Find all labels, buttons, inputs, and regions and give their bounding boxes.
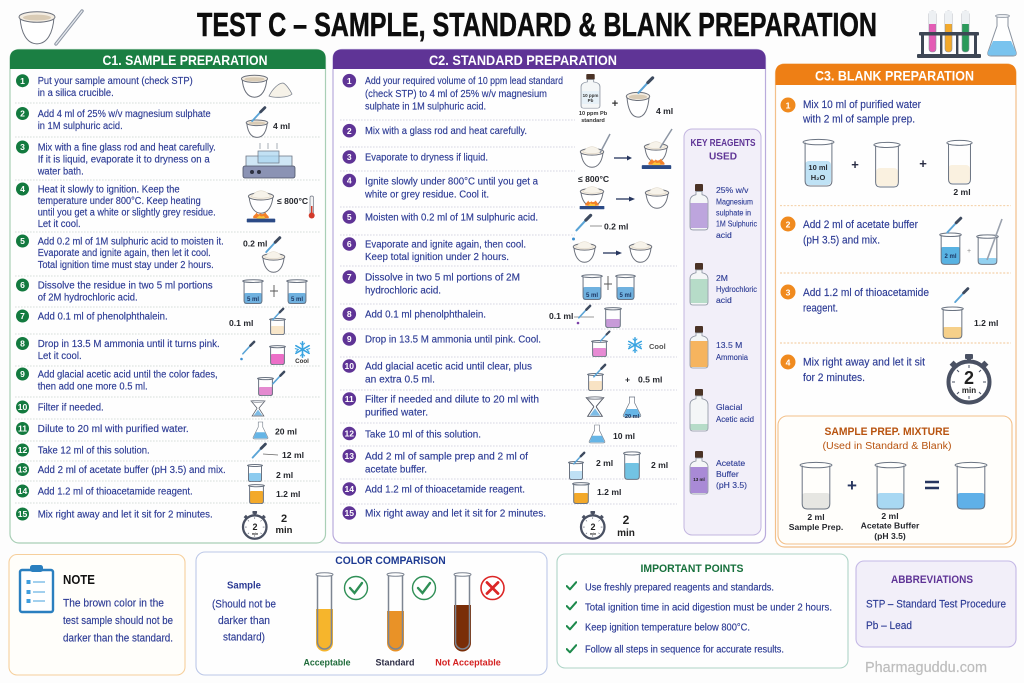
step 9 <box>342 332 541 346</box>
reagent: ammonia <box>690 326 748 368</box>
step 4: Ignite slowly under 800°C until you get a <box>365 176 538 188</box>
heading: C1: C1. SAMPLE PREPARATION <box>102 52 268 68</box>
step 5: 5 <box>347 212 352 222</box>
icon: lead standard bottle plus crucible 4 ml: 10 ppm <box>583 93 598 98</box>
icon: funnel and flask: 20 ml <box>625 414 640 420</box>
step 6: Keep total ignition under 2 hours. <box>365 252 509 263</box>
icon: beaker 2 ml <box>248 465 293 482</box>
icon: water, sample prep, sample prep beakers: 2 ml <box>953 187 971 197</box>
heading: C3: C3. BLANK PREPARATION <box>815 68 974 84</box>
point 2: Total ignition time in acid digestion must be under 2 hours. <box>585 602 832 614</box>
icon: lead standard bottle plus crucible 4 ml: 10 ppm Pb <box>579 111 608 117</box>
step 2 <box>16 107 211 132</box>
reagent: magnesium sulphate: sulphate in <box>716 208 751 218</box>
step 1: with 2 ml of sample prep. <box>802 114 915 126</box>
step 2: Add 2 ml of acetate buffer <box>803 219 918 231</box>
step 3: 3 <box>786 287 791 297</box>
step 2: 2 <box>347 126 352 136</box>
icon: dropper 12 ml <box>253 444 304 460</box>
reagent: glacial acetic acid: Acetic acid <box>716 414 754 424</box>
icon: beakers 2 ml and 2 ml <box>568 452 668 480</box>
step 6: of 2M hydrochloric acid. <box>38 292 138 304</box>
reagent: magnesium sulphate <box>690 184 758 240</box>
icon: stopwatch 2 min: min <box>962 386 976 395</box>
icon: buffer beaker and stirring beaker <box>940 218 1002 264</box>
step 11: 11 <box>18 424 27 434</box>
color comparison heading: COLOR COMPARISON <box>335 555 446 567</box>
icon: crucible on burner with thermometer <box>247 191 315 222</box>
icon: flask 20 ml: 20 ml <box>275 426 297 436</box>
step 7: Dissolve in two 5 ml portions of 2M <box>365 272 520 284</box>
icon: thioacetamide beaker 1.2 ml <box>942 289 998 338</box>
panel: important points <box>557 554 848 668</box>
beaker: acetate buffer: (pH 3.5) <box>874 531 906 541</box>
step 11: Dilute to 20 ml with purified water. <box>38 424 189 435</box>
key reagents heading <box>690 138 756 162</box>
icon: two beakers 5 ml <box>582 275 635 300</box>
step 10: an extra 0.5 ml. <box>365 374 435 386</box>
beaker: sample prep: Sample Prep. <box>789 522 843 532</box>
step 11: purified water. <box>365 408 428 418</box>
sample description <box>212 580 276 644</box>
icon: crucible and powder <box>241 75 292 97</box>
step 6: Evaporate and ignite again, then cool. <box>365 240 526 250</box>
step 1: Put your sample amount (check STP) <box>38 76 193 87</box>
step 1: sulphate in 1M sulphuric acid. <box>365 102 486 112</box>
step 8: Add 0.1 ml phenolphthalein. <box>365 310 486 320</box>
step 2: Add 4 ml of 25% w/v magnesium sulphate <box>38 109 211 120</box>
icon: lead standard bottle plus crucible 4 ml <box>579 74 673 124</box>
icon: phenolphthalein drop <box>229 309 285 335</box>
abbreviation list: STP – Standard Test Procedure <box>866 598 1006 610</box>
step 10: Filter if needed. <box>38 402 104 414</box>
step 3: If it is liquid, evaporate it to dryness on a <box>38 154 210 166</box>
tube: standard: Standard <box>376 658 415 668</box>
step 1: 1 <box>786 100 791 110</box>
abbreviation list: Pb – Lead <box>866 620 912 632</box>
step 2 <box>342 124 527 138</box>
beaker: acetate buffer: Acetate Buffer <box>861 520 920 530</box>
icon: water, sample prep, sample prep beakers <box>803 139 972 197</box>
reagent: glacial acetic acid <box>690 389 754 431</box>
icon: clear beaker plus 0.5 ml: + <box>625 374 630 384</box>
icon: funnel <box>251 400 265 416</box>
icon: two beakers 5 ml: 5 ml <box>291 297 303 303</box>
icon: stopwatch 2 min: 2 <box>623 513 630 527</box>
icon: stopwatch 2 min <box>581 511 635 539</box>
step 11: Filter if needed and dilute to 20 ml with <box>365 394 539 406</box>
icon: crucibles evaporate and ignite <box>573 242 652 262</box>
panel: abbreviations <box>856 561 1016 647</box>
icon: beakers 2 ml and 2 ml: 2 ml <box>651 460 668 470</box>
icon: flask 20 ml <box>253 422 297 439</box>
step 7 <box>342 270 520 296</box>
step 14: Add 1.2 ml of thioacetamide reagent. <box>38 486 193 498</box>
step 12 <box>16 444 150 456</box>
step 8: Let it cool. <box>38 351 82 362</box>
mixture heading: SAMPLE PREP. MIXTURE <box>824 426 950 438</box>
tube: not acceptable <box>435 573 504 668</box>
step 7: hydrochloric acid. <box>365 286 441 296</box>
step 2: (pH 3.5) and mix. <box>803 234 880 246</box>
step 1: (check STP) to 4 ml of 25% w/v magnesium <box>365 89 547 100</box>
panel: note <box>9 554 185 675</box>
step 10 <box>16 400 104 414</box>
step 12: 12 <box>345 429 354 439</box>
step 12: Take 10 ml of this solution. <box>365 430 481 440</box>
step 4: until you get a white or slightly grey residue. <box>38 208 216 218</box>
step 7: 7 <box>20 311 25 321</box>
step 4: Mix right away and let it sit <box>803 356 925 368</box>
icon: ignition at 800 degrees then crucible: ≤ 800°C <box>578 174 609 184</box>
icon: dropper over crucible, 0.2 ml: 0.2 ml <box>243 238 267 248</box>
icon: pink beaker and cool <box>592 332 666 357</box>
icon: stopwatch 2 min <box>948 354 990 402</box>
reagent: acetate buffer: (pH 3.5) <box>716 480 747 490</box>
panel: C2 standard preparation <box>333 50 766 543</box>
step 13: 13 <box>345 451 354 461</box>
icon: stopwatch 2 min: min <box>252 532 258 536</box>
heading: C1 <box>10 50 326 69</box>
beaker: acetate buffer <box>861 462 920 541</box>
icon: clipboard <box>20 565 53 612</box>
beaker: mixture <box>955 462 987 509</box>
step 14: 14 <box>18 486 27 496</box>
step 1: 1 <box>20 76 25 86</box>
icon: clear beaker plus 0.5 ml: 0.5 ml <box>638 374 662 384</box>
reagent: magnesium sulphate: acid <box>716 230 732 240</box>
step 1 <box>342 74 563 112</box>
reagent: acetate buffer: Acetate <box>716 458 745 468</box>
step 11: 11 <box>345 394 354 404</box>
note heading: NOTE <box>63 572 95 587</box>
icon: lead standard bottle plus crucible 4 ml: + <box>612 98 618 110</box>
icon: ignition at 800 degrees then crucible <box>578 174 669 209</box>
step 9: Add glacial acetic acid until the color fades, <box>38 370 218 380</box>
step 4: 4 <box>20 184 25 194</box>
tube: acceptable: Acceptable <box>304 658 350 668</box>
icon: phenolphthalein drop: 0.1 ml <box>229 318 253 328</box>
step 15: Mix right away and let it sit for 2 minutes. <box>38 510 213 520</box>
step 1 <box>16 74 193 99</box>
step 9: 9 <box>347 334 352 344</box>
step 10: 10 <box>345 361 354 371</box>
step 8 <box>16 337 220 362</box>
step 7: 7 <box>347 272 352 282</box>
panel: color comparison <box>196 552 547 675</box>
point 4: Follow all steps in sequence for accurate results. <box>585 644 784 656</box>
point 1: Use freshly prepared reagents and standards. <box>585 582 774 594</box>
icon: stopwatch 2 min: min <box>617 528 635 539</box>
icon: clear beaker plus 0.5 ml <box>588 365 662 391</box>
step 15: Mix right away and let it sit for 2 minutes. <box>365 508 546 520</box>
step 6: Dissolve the residue in two 5 ml portions <box>38 280 213 292</box>
step 13 <box>342 449 528 476</box>
step 15: 15 <box>18 509 27 519</box>
step 8 <box>342 307 486 321</box>
step 4: white or grey residue. Cool it. <box>364 190 489 200</box>
icon: dropper, pink beaker and cool <box>240 342 310 365</box>
icon: two beakers 5 ml: 5 ml <box>586 293 598 299</box>
icon: dropper 0.2 ml: 0.2 ml <box>604 222 628 232</box>
step 4: for 2 minutes. <box>803 372 865 384</box>
icon: buffer beaker and stirring beaker: + <box>967 248 971 255</box>
step 3 <box>342 150 488 164</box>
icon: crucible on burner with thermometer: ≤ 800°C <box>277 196 308 206</box>
icon: stopwatch 2 min: 2 <box>281 513 287 525</box>
reagent: magnesium sulphate: 1M Sulphuric <box>716 218 758 228</box>
note text: The brown color in the <box>63 598 164 610</box>
important points heading: IMPORTANT POINTS <box>640 563 744 575</box>
step 3 <box>16 140 216 178</box>
icon: thioacetamide beaker 1.2 ml: 1.2 ml <box>974 318 998 328</box>
icon: stopwatch 2 min <box>243 511 293 539</box>
plus sign: + <box>847 476 857 495</box>
step 5 <box>16 234 224 271</box>
step 4: temperature under 800°C. Keep heating <box>38 196 201 207</box>
abbreviation list <box>866 598 1006 632</box>
icon: stopwatch 2 min: min <box>276 525 293 536</box>
heading: C3 <box>776 64 1016 85</box>
icon: beaker 1.2 ml: 1.2 ml <box>597 487 621 497</box>
icon: crucible and glass rod <box>19 11 82 44</box>
step 8: Drop in 13.5 M ammonia until it turns pink. <box>38 339 220 350</box>
key reagents heading: USED <box>709 152 737 162</box>
step 9: Drop in 13.5 M ammonia until pink. Cool. <box>365 334 541 346</box>
beaker: acetate buffer: 2 ml <box>881 511 899 521</box>
step 1: 1 <box>347 76 352 86</box>
icon: test tube rack and flask <box>917 11 1016 58</box>
icon: lead standard bottle plus crucible 4 ml: standard <box>581 118 605 124</box>
step 5: Total ignition time must stay under 2 hours. <box>38 260 214 271</box>
sample description: (Should not be <box>212 598 276 610</box>
icon: lead standard bottle plus crucible 4 ml: Pb <box>588 98 594 103</box>
panel: sample prep mixture <box>778 416 1012 544</box>
step 10: Add glacial acetic acid until clear, plus <box>365 362 532 372</box>
icon: two beakers 5 ml: 5 ml <box>247 297 259 303</box>
step 15: 15 <box>345 508 354 518</box>
step 1: Add your required volume of 10 ppm lead standard <box>365 76 563 87</box>
step 5: 5 <box>20 236 25 246</box>
heading: C2 <box>333 50 766 69</box>
equals sign <box>925 482 939 488</box>
mixture heading <box>822 426 952 452</box>
step 2: 2 <box>786 219 791 229</box>
watermark: Pharmaguddu.com: Pharmaguddu.com <box>865 659 987 676</box>
icon: buffer beaker and stirring beaker: 2 ml <box>944 254 957 260</box>
note text <box>63 598 173 644</box>
reagent: magnesium sulphate: Magnesium <box>716 196 753 206</box>
step 3: reagent. <box>803 302 838 314</box>
step 6 <box>342 237 526 263</box>
step 6: 6 <box>347 239 352 249</box>
step 2: 2 <box>20 109 25 119</box>
icon: water, sample prep, sample prep beakers: + <box>851 157 859 172</box>
icon: dropper, pink beaker and cool: Cool <box>295 358 309 365</box>
step 12 <box>342 427 481 440</box>
icon: acetic acid into pink beaker <box>258 372 284 396</box>
step 13: acetate buffer. <box>365 464 427 476</box>
step 3: Add 1.2 ml of thioacetamide <box>803 287 929 299</box>
step 2: in 1M sulphuric acid. <box>38 121 123 132</box>
step 3: 3 <box>347 152 352 162</box>
icon: phenolphthalein 0.1 ml <box>549 306 621 328</box>
reagent: magnesium sulphate: 25% w/v <box>716 185 749 195</box>
icon: lead standard bottle plus crucible 4 ml: 4 ml <box>656 106 673 116</box>
reagent: hydrochloric acid: Hydrochloric <box>716 284 758 294</box>
step 9: then add one more 0.5 ml. <box>38 382 148 392</box>
step 1 <box>780 98 921 126</box>
step 6 <box>16 278 213 304</box>
step 13: Add 2 ml of sample prep and 2 ml of <box>365 452 528 462</box>
icon: crucible with rod then burner <box>580 129 672 169</box>
step 3: Mix with a fine glass rod and heat carefully. <box>38 142 216 154</box>
reagent: hydrochloric acid: acid <box>716 295 732 305</box>
icon: dropper 0.2 ml <box>572 215 628 240</box>
step 9 <box>16 368 218 392</box>
panel: C1 sample preparation <box>10 50 326 543</box>
icon: beaker 2 ml: 2 ml <box>276 470 293 480</box>
step 2 <box>780 216 918 246</box>
step 1: Mix 10 ml of purified water <box>803 99 921 111</box>
step 13: Add 2 ml of acetate buffer (pH 3.5) and mix. <box>38 465 226 476</box>
step 10 <box>342 359 532 386</box>
tube: not acceptable: Not Acceptable <box>435 658 501 668</box>
icon: dropper into crucible, 4 ml: 4 ml <box>273 121 290 131</box>
step 5: Add 0.2 ml of 1M sulphuric acid to moisten it. <box>38 236 224 248</box>
icon: flask 10 ml: 10 ml <box>613 431 635 441</box>
reagent: ammonia: 13.5 M <box>716 340 742 350</box>
step 6: 6 <box>20 280 25 290</box>
step 3: Evaporate to dryness if liquid. <box>365 152 488 164</box>
beaker: sample prep: 2 ml <box>807 512 825 522</box>
tube: standard <box>376 573 436 668</box>
note text: test sample should not be <box>63 615 173 627</box>
panel: C3 blank preparation <box>776 64 1016 547</box>
icon: phenolphthalein 0.1 ml: 0.1 ml <box>549 311 573 321</box>
step 13: 13 <box>18 465 27 475</box>
reagent: acetate buffer: Buffer <box>716 469 739 479</box>
step 11 <box>342 392 539 418</box>
step 8: 8 <box>347 309 352 319</box>
heading: C2: C2. STANDARD PREPARATION <box>429 52 617 68</box>
icon: beaker 1.2 ml: 1.2 ml <box>276 489 300 499</box>
icon: water, sample prep, sample prep beakers: H₂O <box>811 173 825 182</box>
step 9: 9 <box>20 369 25 379</box>
icon: two beakers 5 ml: 5 ml <box>619 293 632 299</box>
icon: beaker 1.2 ml <box>249 485 300 504</box>
step 7: Add 0.1 ml of phenolphthalein. <box>38 312 168 322</box>
reagent: hydrochloric acid <box>690 263 758 305</box>
reagent: hydrochloric acid: 2M <box>716 273 728 283</box>
icon: stopwatch 2 min: 2 <box>252 522 258 532</box>
mixture heading: (Used in Standard & Blank) <box>822 441 952 452</box>
sample description: Sample <box>227 580 261 592</box>
step 3: water bath. <box>37 166 84 178</box>
icon: funnel and flask <box>586 397 641 420</box>
icon: dropper 12 ml: 12 ml <box>282 450 304 460</box>
step 5: Evaporate and ignite again, then let it cool. <box>38 248 211 259</box>
step 4: 4 <box>786 357 791 367</box>
step 4 <box>342 174 538 200</box>
icon: dropper over crucible, 0.2 ml <box>243 238 285 272</box>
icon: water, sample prep, sample prep beakers: 10 ml <box>808 163 828 172</box>
step 4: Let it cool. <box>38 219 81 230</box>
reagent: acetate buffer: 13 ml <box>693 477 705 482</box>
beaker: sample prep <box>789 462 843 532</box>
icon: hotplate water bath <box>243 143 295 178</box>
sample description: standard) <box>223 632 265 644</box>
note text: darker than the standard. <box>63 632 173 644</box>
icon: beakers 2 ml and 2 ml: 2 ml <box>596 458 613 468</box>
panel: key reagents used <box>684 129 761 535</box>
icon: flask 10 ml <box>589 425 635 443</box>
tube: acceptable <box>304 573 368 668</box>
icon: pink beaker and cool: Cool <box>649 342 666 351</box>
step 4 <box>780 354 925 384</box>
icon: stopwatch 2 min: min <box>590 532 596 536</box>
icon: water, sample prep, sample prep beakers: + <box>919 156 927 171</box>
step 3 <box>780 284 929 314</box>
step 1: in a silica crucible. <box>38 88 114 99</box>
step 4 <box>16 182 216 230</box>
icon: dropper into crucible, 4 ml <box>246 108 290 137</box>
step 10: 10 <box>18 402 27 412</box>
point 3: Keep ignition temperature below 800°C. <box>585 622 750 634</box>
reagent: glacial acetic acid: Glacial <box>716 402 742 412</box>
step 5 <box>342 210 538 224</box>
step 14: 14 <box>345 484 354 494</box>
icon: stopwatch 2 min: 2 <box>964 368 974 388</box>
reagent: acetate buffer <box>690 451 747 494</box>
icon: stopwatch 2 min: 2 <box>590 522 596 532</box>
step 3: 3 <box>20 142 25 152</box>
step 4: Heat it slowly to ignition. Keep the <box>38 184 180 195</box>
step 5: Moisten with 0.2 ml of 1M sulphuric acid. <box>365 212 538 224</box>
key reagents heading: KEY REAGENTS <box>690 138 756 149</box>
step 12: Take 12 ml of this solution. <box>38 446 150 456</box>
step 14 <box>342 482 525 496</box>
step 12: 12 <box>18 445 27 455</box>
step 14: Add 1.2 ml of thioacetamide reagent. <box>365 484 525 496</box>
reagent: ammonia: Ammonia <box>716 352 748 362</box>
step 8: 8 <box>20 339 25 349</box>
step 4: 4 <box>347 176 352 186</box>
icon: two beakers 5 ml <box>243 280 307 304</box>
step 2: Mix with a glass rod and heat carefully. <box>365 126 527 137</box>
icon: beaker 1.2 ml <box>573 483 621 504</box>
abbreviations heading: ABBREVIATIONS <box>891 574 973 586</box>
sample description: darker than <box>218 615 270 627</box>
